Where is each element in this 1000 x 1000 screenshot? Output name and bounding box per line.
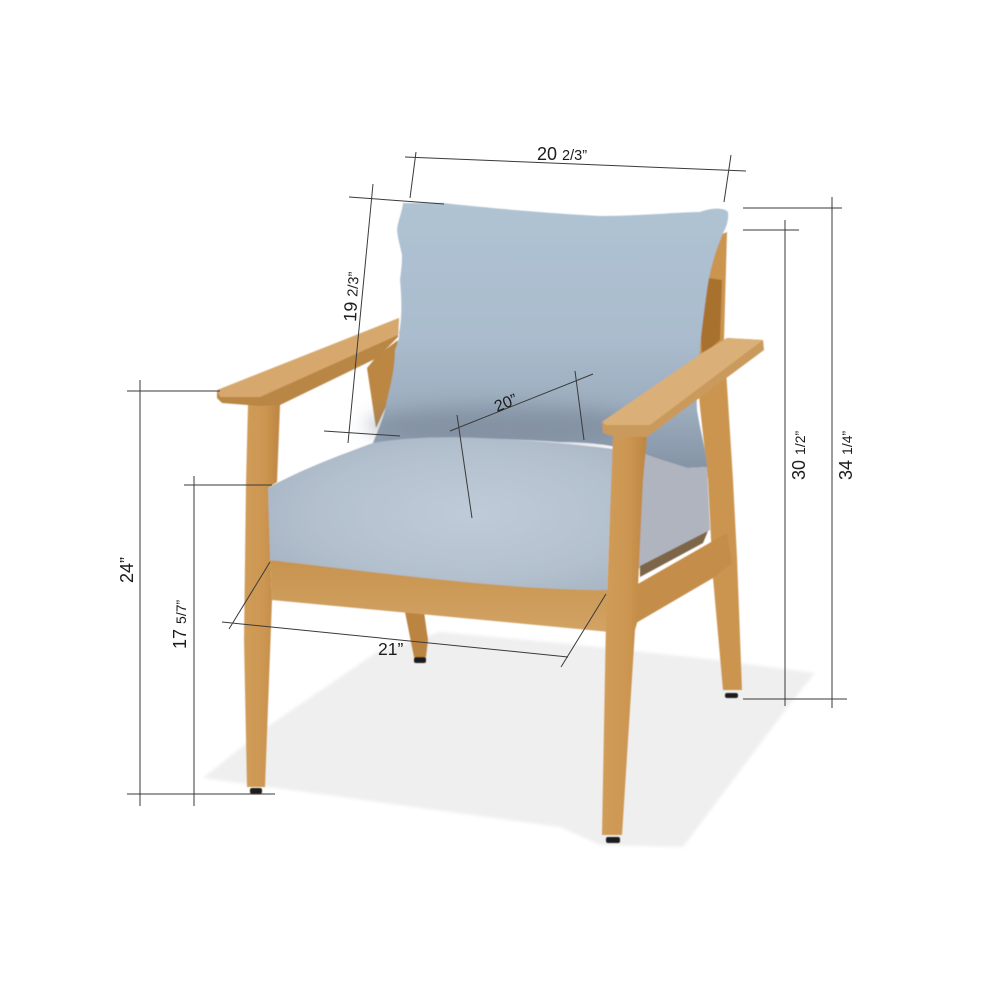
back left post bbox=[367, 340, 398, 428]
dimension: overall height bbox=[743, 197, 856, 708]
dimension: seat depth bbox=[450, 371, 593, 518]
dimension: back frame height: 30 1/2” bbox=[789, 431, 809, 480]
front right leg bbox=[602, 437, 647, 835]
dimension: overall height: 34 1/4” bbox=[836, 431, 856, 480]
side rail bbox=[636, 533, 732, 623]
dimension: back height: 19 2/3” bbox=[340, 271, 363, 322]
seat cushion far side bbox=[636, 450, 710, 570]
chair bbox=[217, 203, 764, 843]
dimension: arm height bbox=[117, 380, 275, 806]
dimension: back height bbox=[324, 184, 444, 443]
feet bbox=[250, 657, 738, 843]
dimension: arm height: 24” bbox=[117, 557, 137, 583]
back right post and leg bbox=[695, 232, 742, 690]
seat cushion bbox=[267, 437, 640, 590]
left arm top face bbox=[217, 318, 399, 397]
front left leg bbox=[244, 405, 280, 787]
dimension: back frame height bbox=[743, 220, 809, 706]
seat rail bbox=[270, 560, 612, 632]
left arm bbox=[217, 318, 399, 406]
dimension: seat width bbox=[222, 562, 606, 667]
dimension: back width: 20 2/3” bbox=[537, 144, 587, 164]
dimension: seat width: 21” bbox=[378, 639, 403, 659]
back cushion bbox=[373, 203, 728, 468]
dimension: seat depth: 20” bbox=[492, 391, 520, 416]
right arm top face bbox=[602, 338, 763, 425]
rail webbing bbox=[640, 531, 708, 577]
right arm bbox=[602, 338, 764, 437]
floor shadow bbox=[203, 632, 815, 847]
dimension: seat height: 17 5/7” bbox=[170, 600, 190, 649]
dimension: seat height bbox=[170, 476, 272, 806]
back right post inner shadow bbox=[700, 278, 722, 356]
back cushion lower shadow bbox=[365, 405, 645, 445]
back left leg bbox=[405, 612, 428, 657]
dimension: back width bbox=[405, 144, 746, 202]
